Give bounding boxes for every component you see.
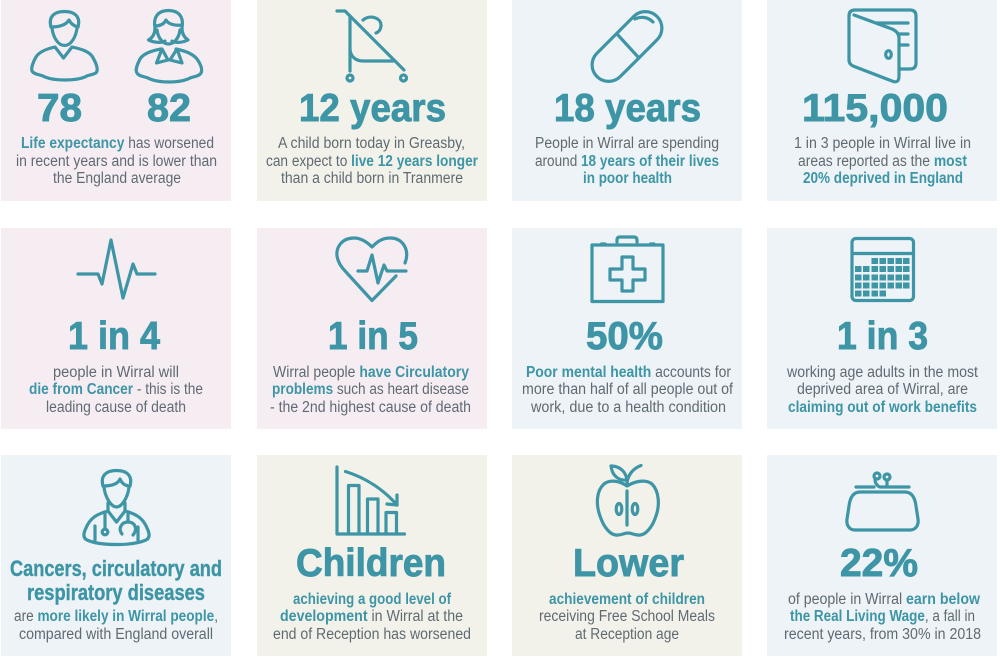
text: living wage description: recent years, from 30% in 2018 (784, 626, 981, 643)
panel: 1 in 4 (1, 228, 231, 429)
panel: 1 in 3 (767, 228, 997, 429)
text: 18 years description (535, 135, 719, 187)
text: out of work benefits description: claiming out of work benefits (788, 399, 977, 416)
icon: heart with pulse (337, 238, 407, 300)
figure: 50%: 50% (586, 315, 663, 358)
text: diseases description: compared with England overall (19, 626, 213, 643)
figure: 78: 78 (37, 87, 82, 130)
figure: 1 in 3: 1 in 3 (837, 315, 928, 358)
text: 115,000 description: 1 in 3 people in Wirral live in (794, 135, 971, 152)
text: lower achievement description (539, 591, 715, 643)
text: 12 years description (266, 135, 478, 187)
icon: man (32, 12, 97, 80)
text: 18 years description: in poor health (583, 170, 672, 187)
text: living wage description: of people in Wirral earn below (788, 591, 981, 608)
text: lower achievement description: achievement of children (549, 591, 705, 608)
panel: 12 years (257, 0, 487, 201)
text: life expectancy description (16, 135, 217, 187)
figure: 1 in 4: 1 in 4 (68, 315, 160, 358)
figure: 115,000: 115,000 (802, 87, 948, 130)
panel: 50% (512, 228, 742, 429)
text: life expectancy description: Life expectancy has worsened (21, 135, 214, 152)
icon: doctor (84, 470, 149, 544)
icon: pulse line (78, 240, 155, 298)
text: children description: end of Reception has worsened (273, 626, 471, 643)
text: circulatory description: problems such as heart disease (272, 381, 469, 398)
text: lower achievement description: at Reception age (575, 626, 679, 643)
panel: 18 years (512, 0, 742, 201)
icon: woman (136, 10, 202, 82)
text: diseases description (14, 608, 218, 643)
text: 115,000 description: 20% deprived in England (803, 170, 963, 187)
figure: 22%: 22% (840, 542, 918, 585)
icon: wallet (849, 10, 916, 82)
text: 12 years description: can expect to live 12 years longer (266, 153, 478, 170)
icon: apple (597, 466, 658, 535)
figure: 82: 82 (147, 87, 191, 130)
text: cancer description: die from Cancer - this is the (29, 381, 203, 398)
text: life expectancy description: in recent years and is lower than (16, 153, 217, 170)
icon: first aid kit (592, 237, 663, 302)
text: 115,000 description: areas reported as the most (798, 153, 967, 170)
text: mental health description (522, 364, 734, 416)
text: 12 years description: A child born today in Greasby, (278, 135, 465, 152)
heading: cancers, circulatory and respiratory diseases: Cancers, circulatory and (10, 556, 222, 581)
text: 12 years description: than a child born in Tranmere (281, 170, 463, 187)
text: mental health description: work, due to a health condition (530, 399, 726, 416)
panel: diseases (1, 455, 231, 656)
panel: 22% (767, 455, 997, 656)
icon: pushchair (337, 11, 406, 81)
text: out of work benefits description: deprived area of Wirral, are (797, 381, 968, 398)
text: circulatory description: - the 2nd highest cause of death (270, 399, 471, 416)
text: cancer description: leading cause of death (46, 399, 186, 416)
text: children description (273, 591, 471, 643)
figure: 18 years: 18 years (554, 87, 701, 130)
icon: purse (847, 473, 918, 530)
text: out of work benefits description (786, 364, 979, 416)
text: children description: development in Wirral at the (280, 608, 463, 625)
text: circulatory description: Wirral people have Circulatory (273, 364, 469, 381)
figure: Lower: Lower (573, 542, 684, 585)
panel: 1 in 5 (257, 228, 487, 429)
text: living wage description (784, 591, 981, 643)
panel: children (257, 455, 487, 656)
figure: Children: Children (296, 542, 446, 585)
figure: 12 years: 12 years (299, 87, 446, 130)
text: living wage description: the Real Living Wage, a fall in (790, 608, 975, 625)
text: cancer description (29, 364, 203, 416)
text: life expectancy description: the England average (53, 170, 181, 187)
heading: cancers, circulatory and respiratory diseases: respiratory diseases (27, 580, 205, 605)
text: out of work benefits description: working age adults in the most (786, 364, 979, 381)
icon: falling bar chart (337, 467, 404, 534)
icon: calendar (852, 238, 914, 300)
icon: pill (585, 5, 669, 88)
panel: lower (512, 455, 742, 656)
text: 18 years description: around 18 years of their lives (535, 153, 719, 170)
text: mental health description: more than half of all people out of (522, 381, 734, 398)
text: circulatory description (270, 364, 471, 416)
text: cancer description: people in Wirral will (53, 364, 179, 381)
text: 18 years description: People in Wirral are spending (535, 135, 719, 152)
text: diseases description: are more likely in Wirral people, (14, 608, 218, 625)
panel: 115,000 (767, 0, 997, 201)
text: children description: achieving a good level of (293, 591, 452, 608)
text: mental health description: Poor mental health accounts for (526, 364, 731, 381)
text: 115,000 description (794, 135, 971, 187)
text: lower achievement description: receiving Free School Meals (539, 608, 715, 625)
panel: life expectancy (1, 0, 231, 201)
figure: 1 in 5: 1 in 5 (328, 315, 418, 358)
heading: cancers, circulatory and respiratory diseases (10, 556, 222, 605)
